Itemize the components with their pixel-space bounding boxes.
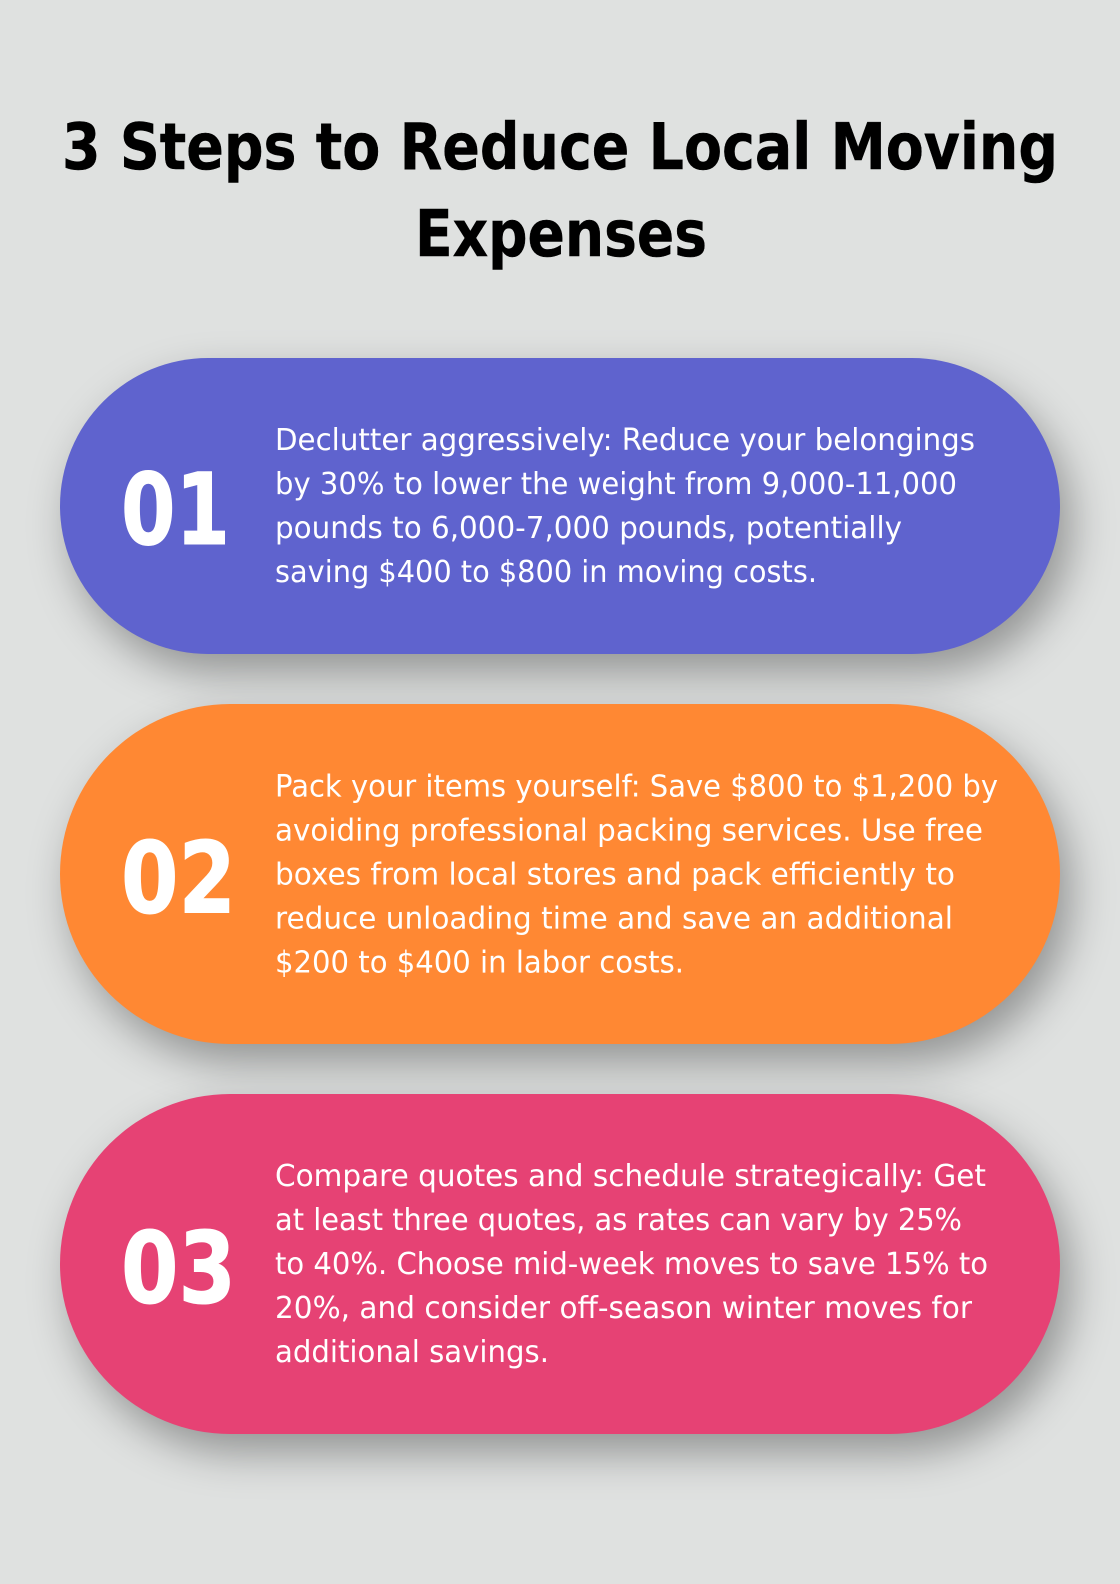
step 3 text: to 40%. Choose mid-week moves to save 15% to <box>275 1247 988 1282</box>
title: Expenses <box>415 198 707 272</box>
step 2 text: boxes from local stores and pack efficiently to <box>275 858 955 892</box>
step 1 text: pounds to 6,000-7,000 pounds, potentially <box>275 511 902 546</box>
step 3 text: at least three quotes, as rates can vary by 25% <box>275 1203 962 1238</box>
step 2 number: 02 <box>121 822 236 936</box>
step 3 text: additional savings. <box>275 1335 549 1370</box>
step 1 text: saving $400 to $800 in moving costs. <box>275 555 817 590</box>
step 1 number: 01 <box>121 453 230 568</box>
step 2 text: avoiding professional packing services. Use free <box>275 814 983 848</box>
step 3 text: 20%, and consider off-season winter moves for <box>275 1291 972 1326</box>
step 3 text <box>275 1159 988 1370</box>
panel: step 3 background <box>60 1094 1060 1434</box>
step 2 text: Pack your items yourself: Save $800 to $1,200 by <box>275 770 998 804</box>
step 2 text: $200 to $400 in labor costs. <box>275 946 684 980</box>
panel: step 2 background <box>60 704 1060 1044</box>
step 1 text <box>275 423 975 590</box>
title <box>62 111 1058 272</box>
step 3 number: 03 <box>121 1212 236 1326</box>
step 1 text: Declutter aggressively: Reduce your belongings <box>275 423 975 458</box>
panel: step 1 background <box>60 358 1060 654</box>
step 1 text: by 30% to lower the weight from 9,000-11,000 <box>275 467 957 502</box>
step 2 text <box>275 770 998 980</box>
step 3 text: Compare quotes and schedule strategically: Get <box>275 1159 986 1194</box>
step 2 text: reduce unloading time and save an additional <box>275 902 953 936</box>
